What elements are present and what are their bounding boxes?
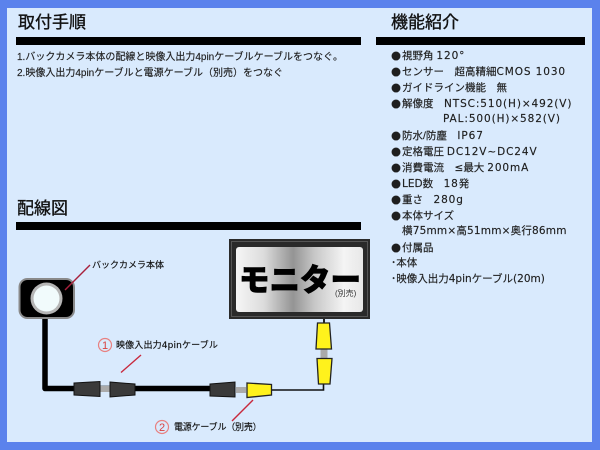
monitor note: (別売) (335, 288, 357, 298)
heading bar: wiring diagram (16, 222, 361, 230)
connector pair 2: power cable (210, 382, 272, 398)
text block: feature list: ● (391, 80, 401, 94)
text block: feature list: 横75mm×高51mm×奥行86mm (402, 225, 567, 237)
label: video cable: 映像入出力4pinケーブル (116, 340, 218, 351)
leader line: camera (65, 265, 90, 290)
text block: feature list: PAL:500(H)×582(V) (443, 113, 561, 125)
callout number 2 (156, 420, 168, 434)
text block: feature list: ● (391, 128, 401, 142)
callout number 1: 1 (102, 340, 108, 352)
text block: feature list: LED数 18発 (402, 178, 469, 190)
text block: feature list: 防水/防塵 IP67 (402, 130, 484, 142)
monitor (229, 239, 370, 319)
text block: feature list: 付属品 (402, 242, 434, 254)
callout number 2: 2 (159, 422, 165, 434)
text block: feature list (391, 48, 572, 285)
text block: feature list: 視野角 120° (402, 50, 465, 62)
heading: features: 機能紹介 (391, 13, 459, 32)
text block: installation steps (17, 50, 343, 79)
text block: feature list: 定格電圧 DC12V~DC24V (402, 146, 538, 158)
text block: feature list: ● (391, 64, 401, 78)
text block: feature list: ● (391, 160, 401, 174)
main black cable (45, 316, 214, 388)
heading bar: installation steps (16, 37, 361, 45)
text block: feature list: 解像度 NTSC:510(H)×492(V) (402, 98, 572, 110)
text block: feature list: ● (391, 176, 401, 190)
label: power cable: 電源ケーブル（別売） (174, 422, 261, 432)
text block: feature list: ● (391, 240, 401, 254)
leader line: video cable (121, 355, 141, 372)
heading: installation steps: 取付手順 (18, 13, 86, 32)
leader line: power cable (232, 400, 253, 421)
icon: camera body (20, 279, 74, 318)
connector pair 3: monitor yellow plugs (316, 323, 332, 384)
connector pair 1: video cable (74, 382, 135, 397)
text block: feature list: ● (391, 48, 401, 62)
text block: feature list: ● (391, 144, 401, 158)
text block: feature list: 消費電流 ≤最大 200mA (402, 162, 529, 174)
heading: wiring diagram: 配線図 (17, 199, 68, 218)
text block: feature list: ･本体 (391, 257, 417, 269)
thin cable to monitor (271, 319, 324, 390)
text block: feature list: ● (391, 192, 401, 206)
text block: feature list: ● (391, 208, 401, 222)
monitor label: モニター (239, 263, 361, 298)
text block: feature list: ● (391, 96, 401, 110)
text block: feature list: ･映像入出力4pinケーブル(20m) (391, 273, 545, 285)
text block: feature list: 本体サイズ (402, 210, 454, 222)
text block: installation steps: 1.バックカメラ本体の配線と映像入出力4pinケーブルケーブルをつなぐ。 (17, 52, 343, 63)
text block: feature list: 重さ 280g (402, 194, 464, 206)
text block: feature list: センサー 超高精細CMOS 1030 (402, 66, 566, 78)
text block: feature list: ガイドライン機能 無 (402, 82, 507, 94)
heading bar: features (376, 37, 585, 45)
callout number 1 (98, 338, 112, 352)
label: camera body: バックカメラ本体 (92, 260, 164, 270)
text block: installation steps: 2.映像入出力4pinケーブルと電源ケーブル（別売）をつなぐ (17, 68, 283, 79)
